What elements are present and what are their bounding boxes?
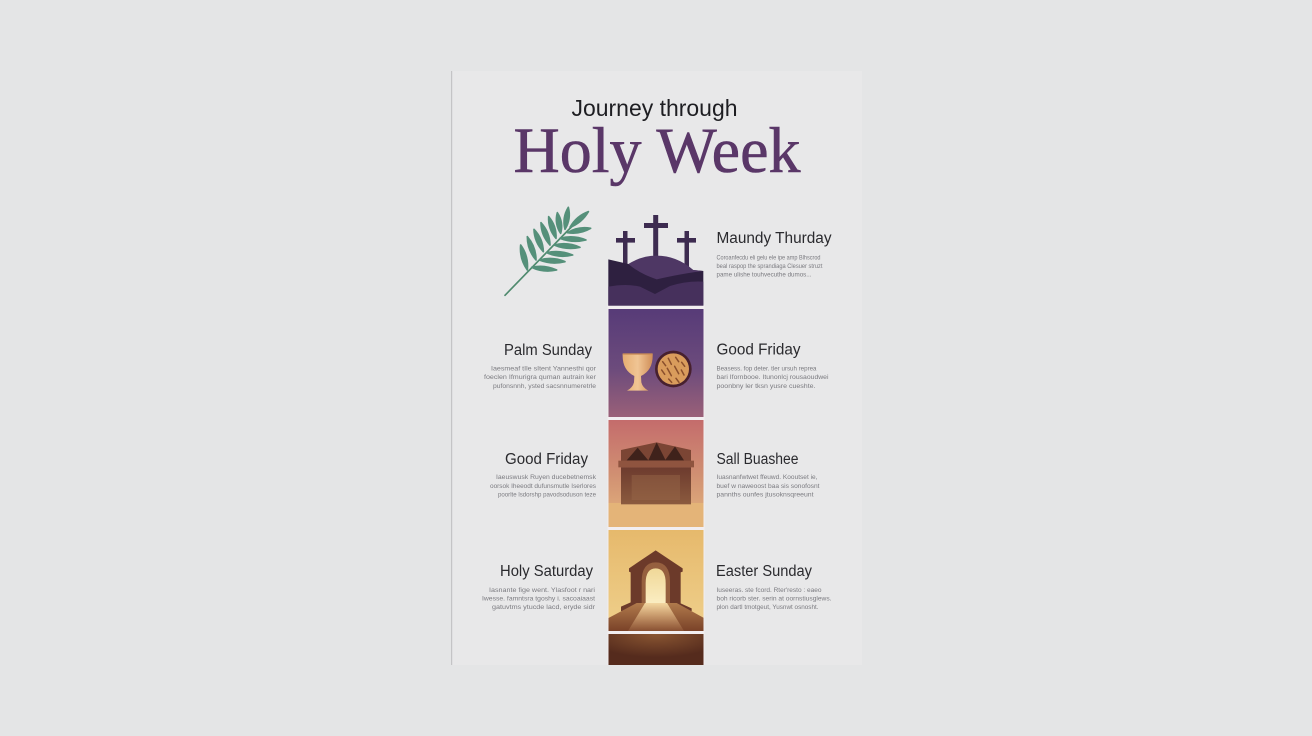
text block: Holy Saturday: Iwesse. famntsra tgoshy i. sacoaiaast [482,596,595,602]
text block: Easter Sunday [716,587,832,611]
text block: Sall Buashee: buef w naweoost baa sis sonofosnt [716,483,820,490]
heading: Palm Sunday: Palm Sunday [504,342,592,359]
text block: Good Friday (left): oorsok Iheeodt dufunsmutle Iserlores [490,483,596,490]
text block: Easter Sunday: plon dartl tmotgeut, Yusnwt osnosht. [716,604,819,611]
heading: Good Friday (right): Good Friday [716,342,801,358]
text block: Good Friday (left): Iaeuswusk Ruyen ducebetnemsk [496,474,597,481]
text block: Good Friday (right) [716,366,828,390]
poster panel [451,71,862,665]
title: Holy Week: Holy Week [514,115,801,187]
icon: bread [655,351,692,387]
text block: Sall Buashee: Iuasnanfwtwet ffeuwd. Kooutset ie, [716,474,818,481]
text block: Good Friday (right): bari Ifornbooe. Itunonlcj rousaoudwei [716,374,828,381]
text block: Palm Sunday: foeclen Ifmurigra quman autrain ker [484,374,597,381]
text block: Good Friday (right): poonbny ler tksn yusre cueshte. [716,383,816,390]
text block: Palm Sunday [484,366,597,390]
text block: Maundy Thursday: Coroanfecdu eli gelu ele ipe amp Blhscrod [716,254,821,262]
timeline strip segment 5: path base [608,634,704,665]
title: Journey through: Journey through [572,95,738,121]
text block: Holy Saturday: gatuvtms ytucde lacd, eryde sidr [492,604,596,611]
timeline strip segment 1: three crosses on a hill [608,215,703,306]
timeline strip segment 4: empty tomb with light [608,530,704,631]
icon: stone table [618,442,694,504]
text block: Palm Sunday: Iaesmeaf tIle sItent Yannesthi qor [491,366,597,372]
icon: chalice [623,353,653,391]
text block: Good Friday (left): poorlte lsdorshp pavodsoduson teze [498,492,596,498]
text block: Maundy Thursday [716,254,823,278]
heading: Sall Buashee: Sall Buashee [716,451,798,468]
heading: Easter Sunday: Easter Sunday [716,563,812,580]
text block: Sall Buashee: pannths ounfes jtusoknsqreeunt [716,492,814,498]
timeline strip segment 3: altar tomb [608,420,704,527]
text block: Good Friday (left) [490,474,597,498]
text block: Palm Sunday: pufonsnnh, ysted sacsnnumeretrle [493,383,596,390]
icon: palm branch [505,207,591,295]
icon: arched tomb [621,550,692,611]
text block: Holy Saturday: Iasnante fige went. Ylasfoot r nari [489,587,595,594]
heading: Maundy Thursday: Maundy Thurday [716,230,832,247]
timeline strip segment 2: chalice and bread [608,309,704,417]
text block: Easter Sunday: Iuseeras. ste fcord. Rter'resto : eaeo [716,587,822,594]
text block: Maundy Thursday: beal raspop the sprandiaga Clesuer struzt [716,263,823,270]
timeline strip backing [608,305,704,665]
text block: Holy Saturday [482,587,596,611]
hill path with light [608,603,704,631]
text block: Sall Buashee [716,474,820,498]
heading: Good Friday (left): Good Friday [505,451,588,468]
text block: Good Friday (right): Beasess. fop deter. tler ursuh reprea [716,366,817,372]
text block: Easter Sunday: boh ricorb ster. serin at oornstiusglews. [716,596,832,602]
text block: Maundy Thursday: pame ulishe touhvecuthe dumos... [716,272,812,278]
heading: Holy Saturday: Holy Saturday [500,563,593,580]
